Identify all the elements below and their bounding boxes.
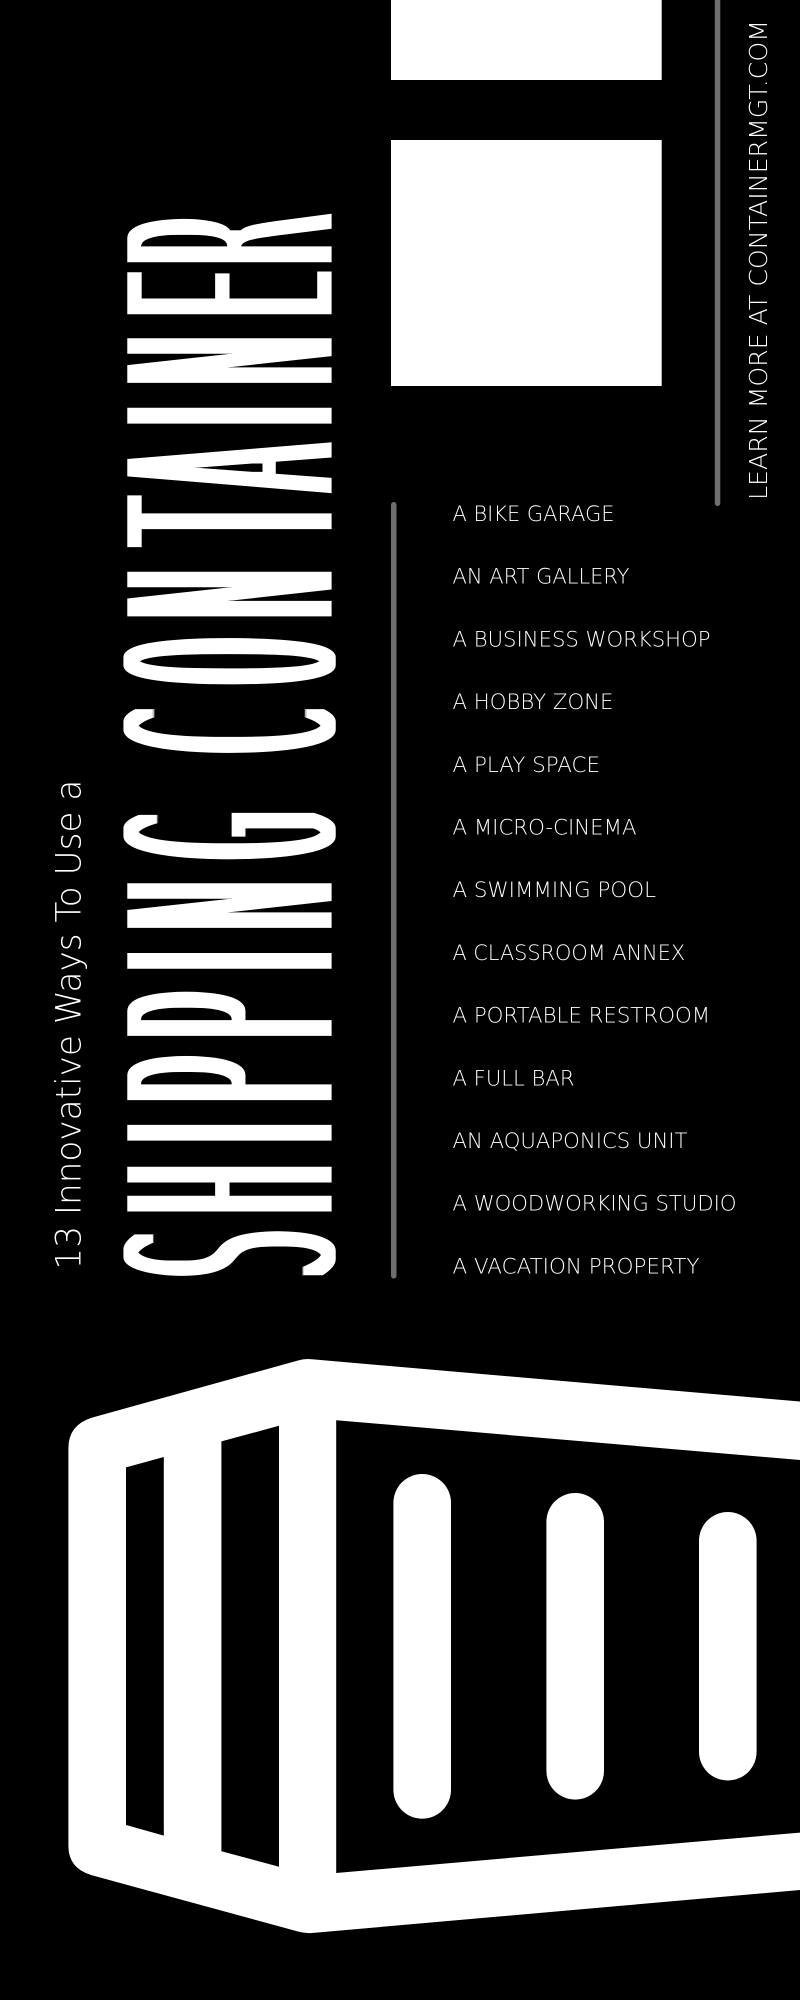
list item 10: A FULL BAR — [452, 1066, 574, 1090]
list item 13: A VACATION PROPERTY — [452, 1254, 700, 1278]
list item 8: A CLASSROOM ANNEX — [452, 941, 685, 965]
list item 1: A BIKE GARAGE — [452, 502, 614, 526]
left door panel — [126, 1457, 164, 1836]
list of 13 uses — [452, 502, 736, 1278]
side rib 1 — [393, 1474, 451, 1819]
list divider — [391, 502, 396, 1279]
top white square (cropped) — [391, 0, 662, 80]
right vertical divider — [715, 0, 720, 506]
list item 7: A SWIMMING POOL — [452, 878, 656, 902]
list item 12: A WOODWORKING STUDIO — [452, 1192, 736, 1216]
container side panel — [336, 1420, 800, 1873]
side rib 2 — [546, 1493, 604, 1800]
subtitle: 13 Innovative Ways To Use a — [50, 780, 90, 1270]
title: shipping container: SHIPPING CONTAINER — [63, 216, 406, 1277]
list item 2: AN ART GALLERY — [452, 565, 630, 589]
container body outline — [68, 1359, 800, 1933]
list item 3: A BUSINESS WORKSHOP — [452, 627, 710, 651]
icon: shipping container — [68, 1359, 800, 1933]
side rib 3 — [699, 1512, 757, 1780]
website call to action: LEARN MORE AT CONTAINERMGT.COM — [744, 20, 773, 500]
list item 5: A PLAY SPACE — [452, 753, 600, 777]
list item 4: A HOBBY ZONE — [452, 690, 614, 714]
list item 6: A MICRO-CINEMA — [452, 816, 636, 840]
list item 11: AN AQUAPONICS UNIT — [452, 1129, 688, 1153]
right door panel — [221, 1426, 279, 1867]
list item 9: A PORTABLE RESTROOM — [452, 1004, 710, 1028]
large white square — [391, 140, 662, 386]
